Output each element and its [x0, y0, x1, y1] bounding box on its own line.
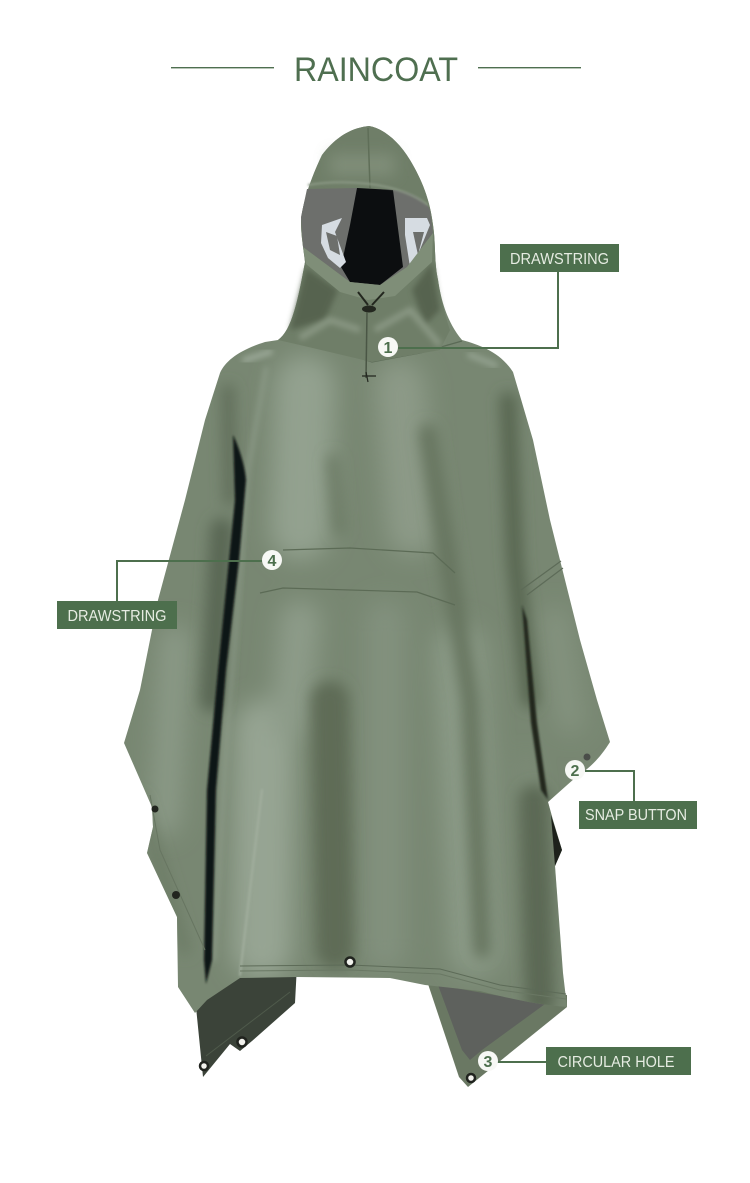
callout 2: snap button — [565, 760, 697, 829]
number badge: 3 — [484, 1054, 493, 1071]
hood lining — [301, 188, 433, 285]
dark folds — [140, 390, 540, 1000]
neck fold highlights — [300, 310, 440, 345]
shoulder sheen — [245, 352, 270, 360]
title rule left — [171, 67, 274, 68]
hood top seam — [368, 128, 370, 188]
pocket placket — [350, 400, 354, 590]
grommets — [200, 958, 475, 1082]
poncho body — [124, 126, 610, 1013]
label — [546, 1047, 691, 1075]
back flap right — [425, 975, 567, 1087]
label — [500, 244, 619, 272]
sleeve seam — [521, 561, 563, 595]
label: SNAP BUTTON — [585, 807, 687, 824]
back flap left stitching — [206, 992, 290, 1056]
label: DRAWSTRING — [68, 608, 166, 625]
hood shell — [278, 126, 450, 362]
number badge: 2 — [571, 763, 580, 780]
leader line — [398, 272, 558, 348]
hood crown highlight — [330, 154, 395, 176]
label — [57, 601, 177, 629]
hood brim highlight — [308, 182, 428, 205]
number badge — [478, 1051, 498, 1071]
black inner fold right — [522, 605, 548, 800]
hood shading — [290, 262, 440, 330]
neck fold — [303, 233, 433, 300]
body edge highlight — [214, 368, 266, 960]
hem stitching — [150, 795, 566, 999]
pocket seam — [260, 548, 455, 605]
flap inner lining — [438, 985, 545, 1060]
label: DRAWSTRING — [510, 251, 609, 268]
fabric folds — [140, 352, 570, 1000]
leader line — [585, 771, 634, 801]
hood velcro left — [321, 218, 346, 268]
leader line — [117, 561, 262, 601]
raincoat illustration — [124, 126, 610, 1087]
leader line — [497, 1061, 546, 1063]
title text: RAINCOAT — [294, 51, 458, 89]
side dark panel — [551, 815, 562, 866]
number badge — [378, 337, 398, 357]
callout 1: drawstring — [378, 244, 619, 357]
number badge — [262, 550, 282, 570]
hood velcro right — [405, 218, 430, 267]
callout 4: drawstring — [57, 550, 282, 629]
snap buttons — [152, 754, 590, 899]
hood snap tabs — [326, 232, 424, 255]
back flap left — [196, 965, 297, 1077]
shoulder yoke seam — [292, 340, 462, 362]
number badge: 4 — [268, 553, 277, 570]
drawcord toggle — [358, 292, 384, 382]
light folds — [165, 385, 570, 950]
label: CIRCULAR HOLE — [558, 1054, 674, 1071]
hood head cavity — [341, 188, 403, 285]
title rule right — [478, 67, 581, 68]
number badge: 1 — [384, 340, 393, 357]
callout 3: circular hole — [478, 1047, 691, 1075]
black inner fold left — [204, 435, 246, 984]
